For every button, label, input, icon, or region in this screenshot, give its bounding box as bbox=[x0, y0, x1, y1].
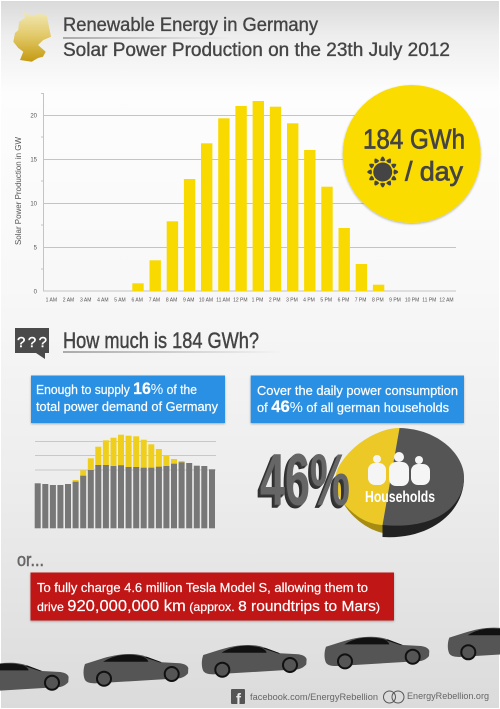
car 3 bbox=[202, 645, 307, 677]
bar chart: solar production by hour: 10 PM bbox=[405, 298, 419, 304]
bar chart: solar production by hour: Solar Power Production in GW bbox=[14, 137, 23, 245]
text: or: or... bbox=[17, 550, 44, 570]
bar chart: solar production by hour: 3 PM bbox=[286, 298, 298, 304]
bar chart: solar production by hour: 6 AM bbox=[131, 298, 143, 304]
pie chart: households: Households bbox=[365, 489, 435, 506]
big 46 percent label: 46% bbox=[257, 443, 347, 524]
bar chart: solar production by hour: 5 AM bbox=[114, 298, 126, 304]
bar chart: solar production by hour: 15 bbox=[30, 158, 38, 164]
bar chart: solar production by hour: 10 bbox=[30, 202, 38, 208]
icon: question speech bubble: ??? bbox=[17, 334, 47, 351]
panel: 46 percent callout: Cover the daily power consumption bbox=[257, 383, 458, 398]
bar chart: solar production by hour: 10 AM bbox=[199, 298, 213, 304]
callout: 184 GWh per day: 184 GWh bbox=[363, 123, 465, 154]
footer credits bbox=[231, 689, 489, 708]
bar chart: solar production by hour: 11 PM bbox=[422, 298, 436, 304]
title bbox=[63, 15, 450, 61]
panel: Tesla callout bbox=[30, 572, 394, 620]
bar chart: solar production by hour: 7 AM bbox=[149, 298, 160, 304]
icon: Germany map bbox=[13, 10, 51, 62]
panel: 46 percent callout: of 46% of all german households bbox=[257, 397, 449, 416]
bar chart: solar production by hour: 8 AM bbox=[166, 298, 177, 304]
car 1 bbox=[0, 663, 69, 694]
big 46 percent label: 46% bbox=[259, 441, 349, 522]
car 2 bbox=[84, 654, 188, 686]
pie chart: households bbox=[335, 428, 464, 537]
bar chart: solar production by hour: 1 AM bbox=[46, 298, 57, 304]
footer credits: facebook.com/EnergyRebellion bbox=[250, 692, 378, 702]
icon: facebook bbox=[231, 689, 245, 708]
icon: question speech bubble bbox=[15, 328, 49, 359]
heading: how much: How much is 184 GWh? bbox=[63, 328, 259, 353]
bar chart: solar production by hour: 7 PM bbox=[355, 298, 366, 304]
panel: 16 percent callout bbox=[31, 376, 225, 423]
title: Renewable Energy in Germany bbox=[63, 15, 318, 36]
bar chart: solar production by hour: 2 PM bbox=[269, 298, 281, 304]
bar chart: solar production by hour: 12 PM bbox=[233, 298, 248, 304]
icon: three people bbox=[368, 452, 430, 486]
title: Solar Power Production on the 23th July 2012 bbox=[63, 40, 450, 61]
panel: 46 percent callout bbox=[251, 376, 464, 423]
big 46 percent label: 46% bbox=[260, 440, 350, 521]
panel: Tesla callout: drive 920,000,000 km (approx. 8 roundtrips to Mars ) bbox=[37, 598, 380, 615]
callout: 184 GWh per day bbox=[343, 85, 481, 223]
bar chart: solar production by hour: 1 PM bbox=[252, 298, 263, 304]
car 4 bbox=[324, 637, 429, 668]
icon: infinity circles bbox=[384, 691, 404, 703]
bar chart: solar production by hour: 9 AM bbox=[183, 298, 194, 304]
bar chart: solar production by hour bbox=[14, 93, 456, 304]
bar chart: solar production by hour: 4 PM bbox=[303, 298, 315, 304]
bar chart: solar production by hour: 0 bbox=[34, 290, 38, 296]
bar chart: solar share of demand bbox=[35, 435, 216, 528]
panel: Tesla callout: To fully charge 4.6 million Tesla Model S, allowing them to bbox=[37, 580, 368, 595]
bar chart: solar production by hour: 8 PM bbox=[372, 298, 384, 304]
big 46 percent label bbox=[257, 440, 350, 524]
bar chart: solar production by hour: 12 AM bbox=[439, 298, 454, 304]
bar chart: solar production by hour: 9 PM bbox=[389, 298, 401, 304]
car 5 bbox=[448, 628, 500, 659]
bar chart: solar production by hour: 6 PM bbox=[338, 298, 349, 304]
icon: facebook: f bbox=[236, 691, 242, 708]
panel: 16 percent callout: Enough to supply 16% of the bbox=[36, 379, 197, 398]
bar chart: solar production by hour: 20 bbox=[30, 114, 38, 120]
icon: sun bbox=[367, 156, 398, 188]
bar chart: solar production by hour: 5 bbox=[34, 246, 38, 252]
bar chart: solar production by hour: 4 AM bbox=[97, 298, 109, 304]
callout: 184 GWh per day: / day bbox=[405, 156, 464, 186]
footer credits: EnergyRebellion.org bbox=[407, 691, 489, 701]
bar chart: solar production by hour: 3 AM bbox=[80, 298, 91, 304]
big 46 percent label: 46% bbox=[258, 442, 348, 523]
bar chart: solar production by hour: 11 AM bbox=[216, 298, 230, 304]
bar chart: solar production by hour: 5 PM bbox=[320, 298, 332, 304]
bar chart: solar production by hour: 2 AM bbox=[63, 298, 74, 304]
panel: 16 percent callout: total power demand of Germany bbox=[36, 399, 218, 414]
